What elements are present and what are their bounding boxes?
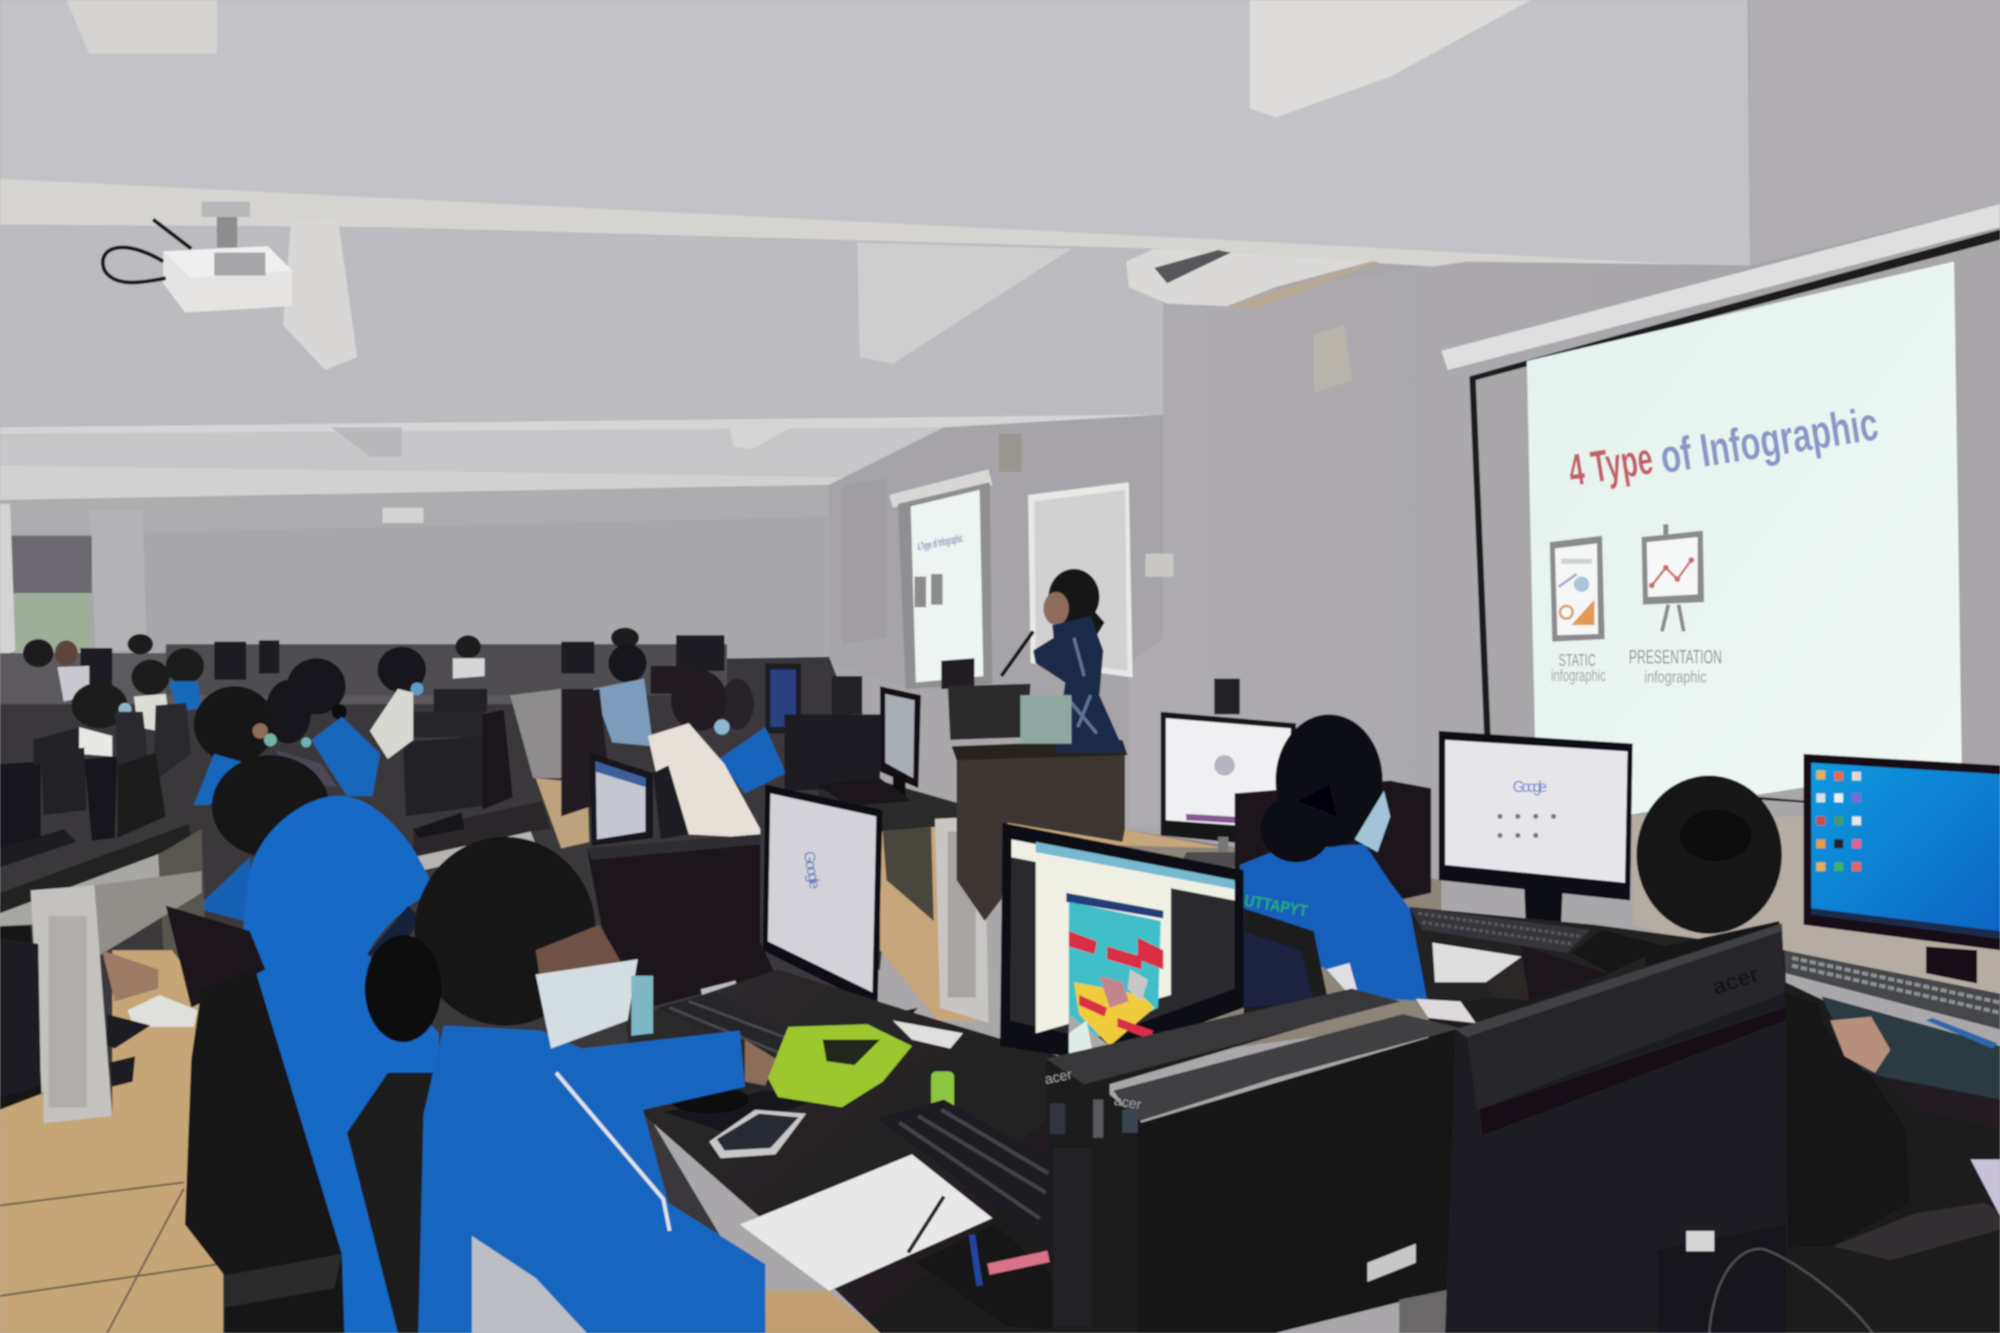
whiteboard <box>1028 482 1173 677</box>
PC tower behind student <box>1235 781 1431 899</box>
seated student right: jacket: UTTAPYT <box>1243 891 1309 921</box>
icon labels <box>1551 647 1722 686</box>
slide title: of Infographic <box>1657 397 1882 484</box>
front student <box>365 837 776 1333</box>
far classroom rows <box>0 635 862 872</box>
teacher desk items <box>941 658 1240 744</box>
right desk and keyboards <box>1409 907 2000 1129</box>
far projection screen <box>889 469 992 689</box>
floor tiles left and sneakers <box>0 938 223 1333</box>
monitor: center small row <box>589 686 921 846</box>
mid desk and floor <box>816 781 1224 1023</box>
center monitor and tower <box>587 784 918 1033</box>
chairs behind front student <box>166 906 439 1333</box>
monitor: Windows desktop <box>1804 754 2000 983</box>
back wall of room <box>0 415 1163 765</box>
PC towers with acer badge: acer <box>1043 1066 1074 1087</box>
green drawstring bag <box>768 1024 954 1110</box>
icon labels: STATIC <box>1559 650 1596 670</box>
far students <box>23 628 639 922</box>
mini infographic poster <box>1066 893 1163 1054</box>
center monitor and tower: Google <box>800 850 823 890</box>
room floor and dark furniture base <box>0 657 2000 1333</box>
icon labels: infographic <box>1644 667 1707 686</box>
office chair right <box>1244 908 1329 1020</box>
ceiling projector <box>103 202 292 313</box>
foreground desk <box>625 969 1059 1333</box>
PC towers with acer badge: acer <box>1113 1092 1143 1112</box>
icon: static infographic poster <box>1550 536 1605 642</box>
mouse and pad <box>663 1086 816 1133</box>
big projection screen <box>1441 204 2000 829</box>
left foreground desk <box>0 824 207 1128</box>
podium <box>952 740 1128 921</box>
foreground monitor back: acer <box>1709 960 1762 1000</box>
row students center <box>568 644 786 838</box>
beige wall below big screen <box>1633 816 2000 1008</box>
PC towers with acer badge <box>1043 989 1460 1333</box>
icon labels: infographic <box>1551 666 1606 685</box>
slide title: 4 Type <box>1565 434 1656 496</box>
black hoodie student right <box>1571 776 2000 1260</box>
left row monitors <box>0 703 191 867</box>
monitor showing infographic <box>1000 823 1244 1061</box>
keyboard: center desk <box>657 992 963 1059</box>
monitor: Google on right <box>1439 731 1633 924</box>
paper note and pen <box>740 1154 1052 1329</box>
air conditioner <box>1126 249 1380 309</box>
wall speaker <box>999 325 1352 472</box>
right side wall <box>1129 204 2000 829</box>
far projection screen: 4 Type of Infographic <box>916 533 964 554</box>
foreground monitor back <box>1445 924 1872 1333</box>
student in blue hood <box>242 796 439 1333</box>
smartphone <box>709 1110 806 1158</box>
monitor: Google on right: Google <box>1513 779 1547 796</box>
monitor: back row student view <box>1161 712 1296 867</box>
keyboard: foreground <box>878 1100 1052 1247</box>
slide title <box>1565 397 1882 496</box>
teacher <box>1001 569 1125 753</box>
icon: presentation board <box>1642 524 1704 631</box>
icon labels: PRESENTATION <box>1629 647 1722 668</box>
seated student right: jacket <box>1240 714 1431 1001</box>
